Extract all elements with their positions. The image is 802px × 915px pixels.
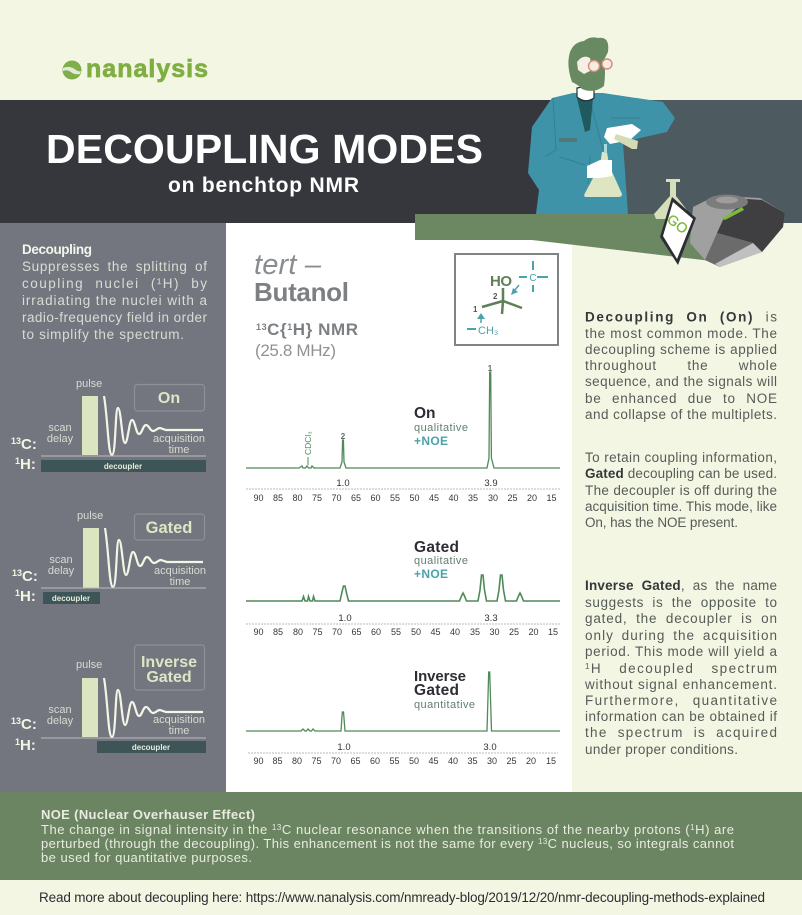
- spectrum: On: 85: [273, 493, 283, 503]
- spectrum: Gated: 90: [253, 627, 264, 637]
- glasses: [588, 60, 600, 72]
- pulse sequence: On: C:: [21, 436, 37, 453]
- spectrum: On: 55: [390, 493, 400, 503]
- molecule diagram: CH₃: [478, 325, 498, 337]
- spectrum: Inverse Gated: 70: [331, 756, 341, 766]
- text: decoupling definition: to simplify the spectrum.: [22, 327, 184, 342]
- spectrum: Gated: 85: [273, 627, 283, 637]
- spectrum: Inverse Gated: Inverse: [414, 668, 466, 685]
- spectrum: Gated: 25: [509, 627, 519, 637]
- icon: tablet: GO: [664, 211, 691, 237]
- text: Gated decoupling: To retain coupling information,: [585, 450, 777, 465]
- heading: compound name: H} NMR: [293, 320, 358, 339]
- pulse sequence: Gated: delay: [48, 565, 75, 577]
- pulse sequence: Inverse Gated: Gated: [146, 669, 192, 686]
- pulse sequence: On: 13: [11, 436, 21, 446]
- spectrum: Inverse Gated: 80: [292, 756, 302, 766]
- icon: tablet: [660, 197, 696, 265]
- icon: background flask: [654, 179, 690, 219]
- panel: NOE definition: [0, 792, 802, 880]
- spectrum: Gated: 20: [528, 627, 539, 637]
- spectrum: Inverse Gated: 65: [350, 756, 361, 766]
- logo: nanalysis: [86, 55, 208, 83]
- text: Inverse Gated decoupling: gated, the decoupler is on: [585, 611, 777, 626]
- spectrum: Inverse Gated: Gated: [414, 682, 459, 699]
- spectrum: Inverse Gated: 50: [409, 756, 419, 766]
- pulse sequence: Inverse Gated: pulse: [76, 659, 102, 671]
- spectrum: On: qualitative: [414, 422, 468, 434]
- pulse sequence: On: On: [158, 390, 180, 407]
- pulse sequence: On: acquisition: [153, 433, 205, 445]
- spectrum: Gated: 50: [411, 627, 421, 637]
- spectrum: On: 3.9: [484, 478, 498, 489]
- hand and test tube: [604, 124, 641, 144]
- text: decoupling definition: coupling nuclei (¹H) by: [22, 276, 207, 291]
- spectrum: Inverse Gated: 35: [467, 756, 478, 766]
- spectrum: On: 45: [429, 493, 439, 503]
- spectrum: Inverse Gated: 3.0: [483, 742, 497, 753]
- icon: benchtop NMR machine: [690, 194, 785, 267]
- panel: NOE definition: The change in signal intensity in the: [41, 822, 267, 837]
- subtitle: on benchtop NMR: [168, 174, 359, 197]
- pulse sequence: Inverse Gated: decoupler: [132, 743, 170, 752]
- panel: NOE definition: be used for quantitative purposes.: [41, 850, 252, 865]
- spectrum: On: [246, 364, 560, 503]
- pulse sequence: Gated: scan: [49, 554, 73, 566]
- text: Inverse Gated decoupling: information can be obtained if: [585, 709, 777, 724]
- spectrum: Gated: 70: [332, 627, 342, 637]
- pulse sequence: Gated: Gated: [146, 519, 192, 537]
- pulse sequence: On: delay: [47, 433, 74, 445]
- heading: compound name: [254, 249, 358, 360]
- pulse sequence: Gated: acquisition: [154, 565, 206, 577]
- spectrum: Inverse Gated: 1.0: [337, 742, 351, 753]
- spectrum: Inverse Gated: 25: [506, 756, 517, 766]
- text: Decoupling On: decoupling scheme is applied: [585, 342, 777, 357]
- panel: NOE definition: 13: [538, 837, 548, 846]
- spectrum: On: 15: [546, 493, 557, 503]
- molecule diagram: [455, 254, 558, 345]
- pulse sequence: Inverse Gated: 1: [15, 737, 20, 747]
- text: decoupling definition: [22, 242, 208, 342]
- pulse sequence: Inverse Gated: 13: [11, 716, 21, 726]
- spectrum: On: 1: [488, 364, 493, 373]
- pulse sequence: Gated: 1: [15, 588, 20, 598]
- spectrum: On: 20: [527, 493, 537, 503]
- panel: NOE definition: perturbed (through the decoupling). This enhancement is not the same for every: [41, 836, 533, 851]
- pulse sequence: On: time: [169, 444, 189, 456]
- spectrum: Inverse Gated: [246, 668, 560, 766]
- spectrum: On: 80: [292, 493, 303, 503]
- heading: compound name: Butanol: [254, 277, 349, 307]
- panel: NOE definition: H) are: [695, 822, 734, 837]
- spectrum: On: 65: [351, 493, 361, 503]
- spectrum: Inverse Gated: 55: [389, 756, 400, 766]
- pulse sequence: Gated: pulse: [77, 510, 103, 522]
- spectrum: Inverse Gated: 15: [546, 756, 556, 766]
- spectrum: Inverse Gated: 60: [370, 756, 380, 766]
- text: Inverse Gated decoupling: without signal enhancement.: [584, 677, 777, 692]
- pulse sequence: Inverse Gated: H:: [20, 737, 36, 754]
- spectrum: Inverse Gated: 40: [448, 756, 458, 766]
- header band: [0, 100, 802, 224]
- heading: compound name: (25.8 MHz): [255, 341, 336, 360]
- title: [46, 126, 483, 197]
- spectrum: Gated: +NOE: [414, 567, 448, 581]
- pulse sequence: On: 1: [15, 456, 20, 466]
- text: Decoupling On: be enhanced due to NOE: [585, 391, 777, 406]
- text: Inverse Gated decoupling: 1: [585, 662, 590, 671]
- pulse sequence: On: decoupler: [104, 462, 142, 471]
- footer link: Read more about decoupling here: https://www.nanalysis.com/nmready-blog/2019/12/20/nmr-decoupling-methods-explained: [39, 890, 765, 905]
- text: Inverse Gated decoupling: Inverse Gated, as the name: [585, 578, 777, 593]
- spectrum: Gated: 55: [391, 627, 401, 637]
- molecule diagram: 2: [493, 292, 498, 301]
- text: Inverse Gated decoupling: under proper conditions.: [585, 742, 738, 757]
- spectrum: Gated: 45: [430, 627, 441, 637]
- text: Inverse Gated decoupling: suggests is the opposite to: [585, 595, 777, 610]
- spectrum: Gated: 3.3: [484, 613, 498, 624]
- spectrum: On: +NOE: [414, 434, 448, 448]
- spectrum: Gated: 75: [312, 627, 323, 637]
- panel: spectra: [226, 223, 572, 792]
- spectrum: On: 50: [409, 493, 420, 503]
- text: Decoupling On: the most common mode. The: [585, 326, 777, 341]
- spectrum: Inverse Gated: 75: [311, 756, 322, 766]
- hair and beard: [568, 37, 608, 91]
- spectrum: Gated: 65: [351, 627, 362, 637]
- text: Decoupling On: [585, 310, 777, 422]
- spectrum: Inverse Gated: 30: [487, 756, 497, 766]
- pulse sequence: Inverse Gated: acquisition: [153, 714, 205, 726]
- text: Gated decoupling: Gated decoupling can be used.: [585, 466, 777, 481]
- text: Decoupling On: and collapse of the multiplets.: [585, 407, 777, 422]
- pulse sequence: Inverse Gated: C:: [21, 716, 37, 733]
- text: decoupling definition: irradiating the nuclei with a: [22, 293, 207, 308]
- panel: NOE definition: C nucleus, so integrals cannot: [548, 836, 734, 851]
- text: Inverse Gated decoupling: Furthermore, quantitative: [585, 693, 777, 708]
- text: decoupling definition: radio-frequency field in order: [22, 310, 208, 325]
- spectrum: Gated: qualitative: [414, 555, 468, 567]
- title: DECOUPLING MODES: [46, 126, 483, 172]
- spectrum: On: 1.0: [336, 478, 350, 489]
- pulse sequence: Gated: C:: [22, 568, 38, 585]
- pulse sequence: Gated: time: [170, 576, 190, 588]
- spectrum: On: 40: [448, 493, 459, 503]
- pulse sequence: Gated: [12, 510, 206, 605]
- icon: scientist: [528, 37, 675, 214]
- pulse sequence: Inverse Gated: scan: [48, 704, 72, 716]
- text: Inverse Gated decoupling: [584, 578, 777, 757]
- text: decoupling definition: Decoupling: [22, 242, 92, 257]
- pulse sequence: Inverse Gated: time: [169, 725, 189, 737]
- spectrum: Inverse Gated: quantitative: [414, 699, 475, 711]
- spectrum: On: 30: [488, 493, 498, 503]
- spectrum: On: CDCl₃: [303, 431, 313, 455]
- spectrum: On: 75: [312, 493, 322, 503]
- heading: compound name: 1: [287, 322, 292, 332]
- spectrum: Gated: 80: [293, 627, 303, 637]
- spectrum: On: 60: [370, 493, 381, 503]
- text: Gated decoupling: The decoupler is off during the: [585, 483, 777, 498]
- spectrum: Inverse Gated: 20: [526, 756, 536, 766]
- spectrum: On: 35: [468, 493, 478, 503]
- flask: [584, 152, 622, 197]
- text: Decoupling On: sequence, and the signals will: [585, 374, 777, 389]
- pulse sequence: Gated: 13: [12, 568, 22, 578]
- spectrum: On: 2: [341, 432, 346, 441]
- text: Decoupling On: throughout the whole: [585, 358, 777, 373]
- pulse sequence: Inverse Gated: delay: [47, 715, 74, 727]
- molecule diagram: C: [529, 273, 537, 284]
- text: Decoupling On: Decoupling On (On) is: [585, 310, 777, 324]
- spectrum: Gated: 15: [548, 627, 558, 637]
- panel: NOE definition: C nuclear resonance when the transitions of the nearby protons (: [282, 822, 690, 837]
- green bench: [415, 214, 725, 262]
- spectrum: Gated: 35: [470, 627, 480, 637]
- spectrum: Gated: 60: [371, 627, 381, 637]
- pulse sequence: On: H:: [20, 456, 36, 473]
- pulse sequence: Gated: decoupler: [52, 594, 90, 603]
- pulse sequence: Inverse Gated: Inverse: [141, 654, 197, 671]
- text: Inverse Gated decoupling: the spectrum is acquired: [585, 725, 777, 740]
- spectrum: Gated: Gated: [414, 539, 459, 556]
- spectrum: Gated: 30: [489, 627, 500, 637]
- spectrum: Gated: 1.0: [338, 613, 352, 624]
- text: Inverse Gated decoupling: H decoupled spectrum: [591, 661, 777, 676]
- text: Inverse Gated decoupling: period. This mode will yield a: [585, 644, 777, 659]
- molecule diagram: 1: [473, 305, 478, 314]
- spectrum: On: 90: [253, 493, 264, 503]
- heading: compound name: tert –: [254, 249, 322, 281]
- panel: NOE definition: 1: [690, 823, 695, 832]
- spectrum: Inverse Gated: 85: [272, 756, 283, 766]
- panel: definition and pulse sequences: [0, 223, 226, 792]
- pulse sequence: Inverse Gated: [11, 645, 206, 754]
- pulse sequence: On: scan: [48, 422, 72, 434]
- spectrum: Inverse Gated: 45: [428, 756, 439, 766]
- pulse sequence: Gated: H:: [20, 588, 36, 605]
- pulse sequence: On: [11, 378, 206, 473]
- spectrum: Inverse Gated: 90: [253, 756, 264, 766]
- heading: compound name: 13: [256, 322, 267, 332]
- text: Gated decoupling: acquisition time. This mode, like: [585, 499, 777, 514]
- spectrum: On: 70: [331, 493, 342, 503]
- panel: NOE definition: 13: [272, 823, 282, 832]
- text: Gated decoupling: On, has the NOE present.: [585, 515, 738, 530]
- panel: NOE definition: NOE (Nuclear Overhauser Effect): [41, 807, 255, 822]
- spectrum: On: 25: [507, 493, 518, 503]
- molecule diagram: HO: [490, 273, 512, 290]
- pulse sequence: On: pulse: [76, 378, 102, 390]
- text: decoupling definition: Suppresses the splitting of: [22, 259, 207, 274]
- spectrum: Gated: 40: [450, 627, 460, 637]
- text: Gated decoupling: [585, 450, 777, 530]
- heading: compound name: C{: [267, 320, 287, 339]
- spectrum: Gated: [246, 539, 560, 637]
- spectrum: On: On: [414, 405, 436, 422]
- text: Inverse Gated decoupling: only during the acquisition: [585, 628, 777, 643]
